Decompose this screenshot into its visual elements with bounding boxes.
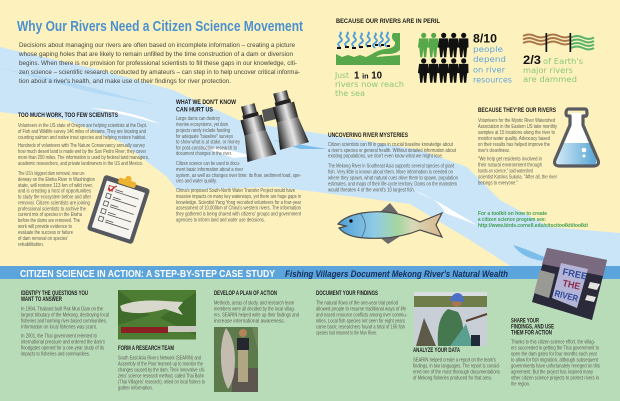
body text — [478, 118, 557, 186]
body text: SEARIN helped create a report on the team's — [413, 358, 496, 364]
body text: Citizen scientists can fill in gaps in crucial baseline knowledge about — [328, 142, 454, 148]
body text — [118, 356, 205, 392]
body text: academic researchers, and private landowners in the US and Mexico. — [18, 161, 143, 167]
body text: fisheries and harming river-based communities. — [21, 318, 107, 324]
heading: THEM FOR ACTION — [511, 330, 552, 336]
body text: the region. — [511, 382, 530, 388]
heading — [176, 100, 236, 114]
body text: for post-construction research to — [176, 146, 237, 152]
body text: governments have unfortunately reneged on this — [511, 364, 600, 370]
body text: of Mekong fisheries produced for that area. — [413, 376, 492, 382]
body text: gather information. — [118, 386, 153, 392]
body text: South East Asia Rivers Network (SEARIN) and — [118, 356, 201, 362]
body text: other citizen science projects to protect rivers in — [511, 376, 599, 382]
body text: international pressure and ordered the dam's — [21, 340, 105, 346]
heading — [21, 291, 88, 303]
body text: changes caused by the dam. Their innovative citi- — [118, 368, 205, 374]
body text: The Mekong River in Southeast Asia supports several species of giant — [328, 164, 454, 170]
body text — [316, 300, 407, 336]
body text: Methods, areas of study, and research team — [214, 300, 294, 306]
title: Why Our Rivers Need a Citizen Science Movement — [17, 19, 303, 35]
stat: 8/10 — [473, 34, 512, 84]
body text: where they spawn, what natural cues drive them to spawn, population — [328, 176, 458, 182]
section: because they're our rivers — [478, 108, 557, 186]
body text — [21, 306, 109, 358]
icon: people pictogram — [418, 33, 469, 83]
body text: members were all decided by the local villag- — [214, 306, 295, 312]
toolkit link: http://www.birds.cornell.edu/citscitoolkit/toolkit — [478, 223, 588, 229]
body text: existing populations, we don't even know what we might lose. — [328, 154, 443, 160]
body text: they gathered is being shared with citizens' groups and government — [176, 212, 302, 218]
body text: largest tributary of the Mekong, destroying local — [21, 312, 109, 318]
body text: scientist Katrina Sukola. "After all, the river — [478, 174, 557, 180]
photo: fisher on boat — [414, 292, 487, 346]
step: analyze data — [413, 348, 500, 382]
body text: cies and water quality. — [176, 178, 217, 184]
photo: child and giant fish — [214, 327, 258, 392]
body text: impacts to fisheries and communities. — [21, 352, 90, 358]
stat: 2/3 — [523, 55, 583, 84]
toolkit link — [478, 211, 588, 229]
icon: rivers not reaching sea — [336, 32, 400, 65]
banner subheading: Fishing Villagers Document Mekong River's Natural Wealth — [285, 269, 508, 280]
body text: Thanks to this citizen science effort, the villag- — [511, 340, 595, 346]
body text: more than 250 miles. The information is used by federal land managers, — [18, 155, 149, 161]
heading: FINDINGS, AND USE — [511, 324, 554, 330]
photo: free the river: FREE — [561, 267, 588, 283]
body text: rehabilitation. — [18, 242, 44, 248]
body text — [328, 142, 458, 194]
body text: In 1994, Thailand built Pak Mun Dam on the — [21, 306, 103, 312]
body text: Large dams can destroy — [176, 116, 220, 122]
section: because our rivers are in peril — [334, 19, 594, 98]
stat: 1 in 10: the sea — [335, 89, 365, 98]
icon: fish — [338, 203, 442, 244]
intro text: begins. When there is no provision for professional scientists to fill these gaps in our knowledge, citi- — [19, 60, 297, 67]
icon: flask — [555, 109, 598, 166]
body text: projects rarely include funding — [176, 128, 230, 134]
body text: would threaten 4 of the world's 10 largest fish. — [328, 188, 415, 194]
body text: increase international awareness. — [214, 318, 285, 324]
heading — [511, 318, 554, 336]
body text: current mix of species in the Elwha — [18, 212, 82, 218]
photo: free the river: RIVER — [554, 288, 580, 304]
heading: FORM A RESEARCH TEAM — [118, 346, 174, 352]
banner heading: CITIZEN SCIENCE IN ACTION: A STEP-BY-STEP CASE STUDY — [20, 268, 275, 280]
stat: 2/3: are dammed — [523, 75, 577, 84]
banner — [0, 266, 620, 280]
body text: The US's biggest dam removal, now un- — [18, 171, 85, 177]
stat: 2/3: 2/3 — [523, 55, 541, 67]
stat: 8/10: resources — [473, 76, 512, 84]
stat: 8/10: on river — [473, 66, 506, 74]
heading: DOCUMENT YOUR FINDINGS — [316, 291, 378, 297]
body text: to show what is at stake, or money — [176, 140, 240, 146]
intro text: Decisions about managing our rivers are often based on incomplete information – creating a picture — [19, 42, 295, 49]
intro text: tion about a river's health, and make use of their findings for river protection. — [19, 78, 231, 85]
heading: WHAT WE DON'T KNOW — [176, 100, 236, 106]
body text: document changes in the river. — [176, 151, 232, 157]
stat: 8/10: people — [473, 45, 503, 54]
toolkit link: a citizen science program see: — [478, 217, 546, 223]
body text: to allow for fish migration, although subsequent — [511, 358, 599, 364]
step: share findings — [511, 318, 600, 388]
body text — [18, 123, 149, 248]
body text: open the dam gates for four months each year — [511, 352, 597, 358]
body text: before the dams are removed. The — [18, 218, 80, 224]
river band — [0, 47, 620, 267]
body text: ers succeeded in getting the Thai government to — [511, 346, 599, 352]
body text: of dam removal on species' — [18, 236, 68, 242]
heading: CAN HURT US — [176, 108, 213, 114]
body text: In 2001, the Thai government relented to — [21, 334, 97, 340]
body text: assessment of 10,000km of China's western rivers. The information — [176, 206, 301, 212]
intro text: whose gaping holes that are likely to remain unfilled by the time construction of a dam or diversion — [18, 51, 293, 58]
body text: massive impacts on many key waterways, yet there are huge gaps in — [176, 194, 301, 200]
body text: a river's species or general health. Without detailed information about — [328, 148, 457, 154]
body text: nities. Local fish species not seen for eight years — [316, 318, 405, 324]
body text: to study the ecosystem before and after — [18, 194, 91, 200]
stat: 8/10: depend — [473, 55, 506, 64]
body text: findings, in two languages. The report is consid- — [413, 364, 500, 370]
toolkit link: For a toolkit on how to create — [478, 211, 547, 217]
heading: UNCOVERING RIVER MYSTERIES — [328, 133, 408, 139]
body text: their natural environment through — [478, 162, 542, 168]
body text: The natural flows of the one-year trial period — [316, 300, 398, 306]
body text: allowed people to resume traditional ways of life — [316, 306, 406, 312]
body text: China's proposed South-North Water Transfer Project would have — [176, 188, 295, 194]
body text: floodgates opened for a one-year study of its — [21, 346, 104, 352]
body text: hands-on science," said watershed — [478, 168, 533, 174]
intro text: zen science – scientific research conducted by amateurs – can step in to help uncover critical informa- — [19, 69, 300, 76]
heading: BECAUSE THEY'RE OUR RIVERS — [478, 108, 556, 114]
body text — [511, 340, 600, 388]
body text: ers. SEARIN helped write up their findings and — [214, 312, 299, 318]
body text: ment basic information about a river — [176, 167, 243, 173]
stat: 8/10: 8/10 — [473, 34, 497, 46]
body text: and is creating a host of opportunities — [18, 188, 91, 194]
body text: (Thai Villagers' research), relied on local fishers to — [118, 380, 205, 386]
body text: Citizen science can be used to docu- — [176, 161, 240, 167]
heading: SHARE YOUR — [511, 318, 539, 324]
body text: came back; researchers found a total of 156 fish — [316, 324, 405, 330]
stat: 1 in 10: rivers now reach — [335, 80, 404, 89]
body text: fish. Very little is known about them. More information is needed on — [328, 170, 453, 176]
heading: IDENTIFY THE QUESTIONS YOU — [21, 291, 88, 297]
section: what we don't know — [176, 100, 302, 224]
stat: 1 in 10 — [334, 70, 404, 98]
body text: belongs to everyone." — [478, 180, 518, 186]
body text: estimates, and maps of their life-cycle territory. Dams on the mainstem — [328, 182, 457, 188]
body text: derway on the Elwha River in Washington — [18, 177, 95, 183]
heading: TOO MUCH WORK, TOO FEW SCIENTISTS — [18, 113, 118, 119]
body text: knowledge. Scientist Yang Yong recruited volunteers for a four-year — [176, 200, 301, 206]
photo: free the river — [532, 248, 607, 320]
body text: Volunteers in the US state of Oregon are helping scientists at the Dept. — [18, 123, 147, 129]
body text — [176, 116, 302, 224]
stat: 2/3: of Earth's — [543, 57, 583, 66]
body text: system, as well as changes over time: its flow, sediment load, spe- — [176, 173, 301, 179]
step: form a research team — [118, 346, 205, 392]
body text: agreement. But the project has inspired many — [511, 370, 593, 376]
body text: ered one of the most thorough documentations — [413, 370, 500, 376]
stat: 1 in 10: Just — [334, 71, 349, 80]
heading: BECAUSE OUR RIVERS ARE IN PERIL — [336, 19, 440, 25]
body text: Assembly of the Poor teamed up to monitor the — [118, 362, 203, 368]
step: identify questions — [21, 291, 109, 358]
icon: clipboard — [87, 169, 152, 244]
section: uncovering river mysteries — [328, 133, 458, 194]
body text: Association in the Eastern US take monthly — [478, 124, 557, 130]
stat: 1 in 10: 1 in 10 — [354, 70, 382, 82]
body text: Information on local fisheries was scant. — [21, 324, 97, 330]
body text: evaluate the success or failure — [18, 230, 73, 236]
body text: for adequate "baseline" surveys — [176, 134, 233, 140]
body text: and eased resource conflicts among river commu- — [316, 312, 407, 318]
step: develop a plan — [214, 291, 299, 324]
intro text — [18, 42, 300, 85]
heading: DEVELOP A PLAN OF ACTION — [214, 291, 277, 297]
body text: how much desert land is made wet by the San Pedro River; they cover — [18, 149, 146, 155]
body text: species had returned to the Mun River. — [316, 330, 377, 336]
body text: agencies to inform land and water use decisions. — [176, 218, 265, 224]
body text: riverine ecosystems, yet dam — [176, 122, 228, 128]
photo: free the river: THE — [561, 278, 581, 293]
body text — [214, 300, 299, 324]
body text: work will provide evidence to — [18, 224, 72, 230]
heading: WANT TO ANSWER — [21, 297, 62, 303]
step: document findings — [316, 291, 407, 336]
body text: "We help get residents involved in — [478, 156, 542, 162]
heading: ANALYZE YOUR DATA — [413, 348, 460, 354]
icon: dammed river — [523, 33, 594, 52]
lower green panel — [0, 279, 620, 401]
body text: zens' science research method, called Thai Bahn — [118, 374, 204, 380]
body text: river's cleanliness. — [478, 148, 510, 154]
body text: Hundreds of volunteers with The Nature Conservancy annually survey — [18, 143, 145, 149]
body text: samples at 15 locations along the river to — [478, 130, 555, 136]
body text: of Fish and Wildlife survey 146 miles of streams. They are locating and — [18, 129, 146, 135]
body text — [413, 358, 500, 382]
body text: removal. Citizen scientists are joining — [18, 200, 90, 206]
body text: on their results has helped improve the — [478, 142, 550, 148]
section: too much work — [18, 113, 149, 248]
body text: state, will restore 113 km of wild river, — [18, 183, 93, 189]
body text: Volunteers for the Mystic River Watershed — [478, 118, 555, 124]
icon: binoculars — [233, 88, 309, 162]
body text: professional scientists to archive the — [18, 206, 86, 212]
photo: fish and pen — [118, 290, 196, 340]
stat: 2/3: major rivers — [523, 66, 573, 75]
body text: monitor water quality. Advocacy based — [478, 136, 550, 142]
body text: counting salmon and native trout species and helping restore habitat. — [18, 135, 146, 141]
